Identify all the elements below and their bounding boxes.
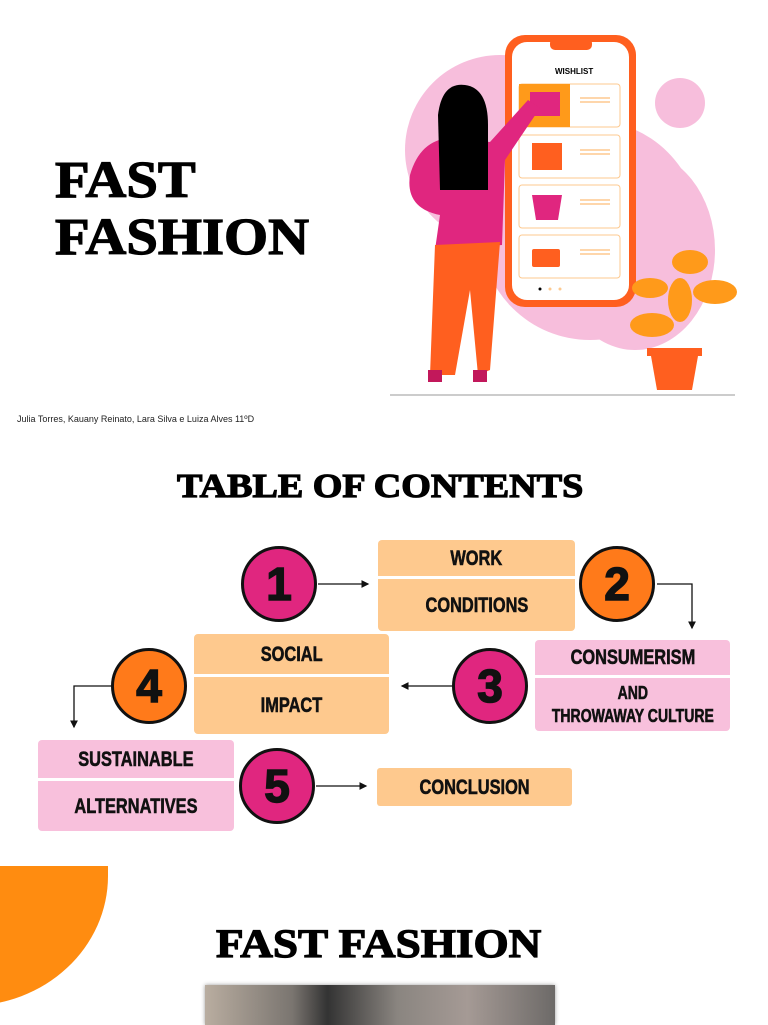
item 5 circle <box>239 748 315 824</box>
heading: fast fashion 2: FAST FASHION <box>216 921 541 966</box>
illustration: woman with phone wishlist <box>390 35 737 396</box>
item 3 circle <box>452 648 528 724</box>
decorative orange shape <box>0 866 108 1006</box>
item 2: consumerism: AND <box>617 682 648 702</box>
heading: table of contents: TABLE OF CONTENTS <box>177 468 583 505</box>
item 4 circle <box>111 648 187 724</box>
box: social impact <box>194 634 389 734</box>
title: fast fashion: FAST <box>55 152 196 209</box>
box: sustainable alternatives: SUSTAINABLE <box>78 748 194 770</box>
box: social impact: IMPACT <box>261 694 322 717</box>
box: sustainable alternatives: ALTERNATIVES <box>74 794 198 818</box>
item 5 circle: 5 <box>264 760 290 812</box>
credit text: Julia Torres, Kauany Reinato, Lara Silva e Luiza Alves 11ºD <box>17 414 254 424</box>
box: sustainable alternatives <box>38 740 234 831</box>
item 1: work conditions <box>241 540 575 631</box>
item 1: work conditions: 1 <box>266 558 292 610</box>
item 4 circle: 4 <box>136 660 162 712</box>
item 1: work conditions: CONDITIONS <box>425 594 528 616</box>
item 2: consumerism <box>535 546 730 731</box>
item 2: consumerism: 2 <box>604 558 630 610</box>
item 3 circle: 3 <box>477 660 503 712</box>
item 2: consumerism: CONSUMERISM <box>570 646 695 669</box>
box: social impact: SOCIAL <box>261 642 322 666</box>
title: fast fashion: FASHION <box>55 209 309 266</box>
item 2: consumerism: THROWAWAY CULTURE <box>552 706 713 726</box>
item 1: work conditions: WORK <box>451 546 502 570</box>
illustration: woman with phone wishlist: WISHLIST <box>555 67 593 76</box>
box: conclusion: CONCLUSION <box>419 776 530 798</box>
title: fast fashion <box>55 152 309 266</box>
photo: clothing waste <box>205 985 555 1025</box>
